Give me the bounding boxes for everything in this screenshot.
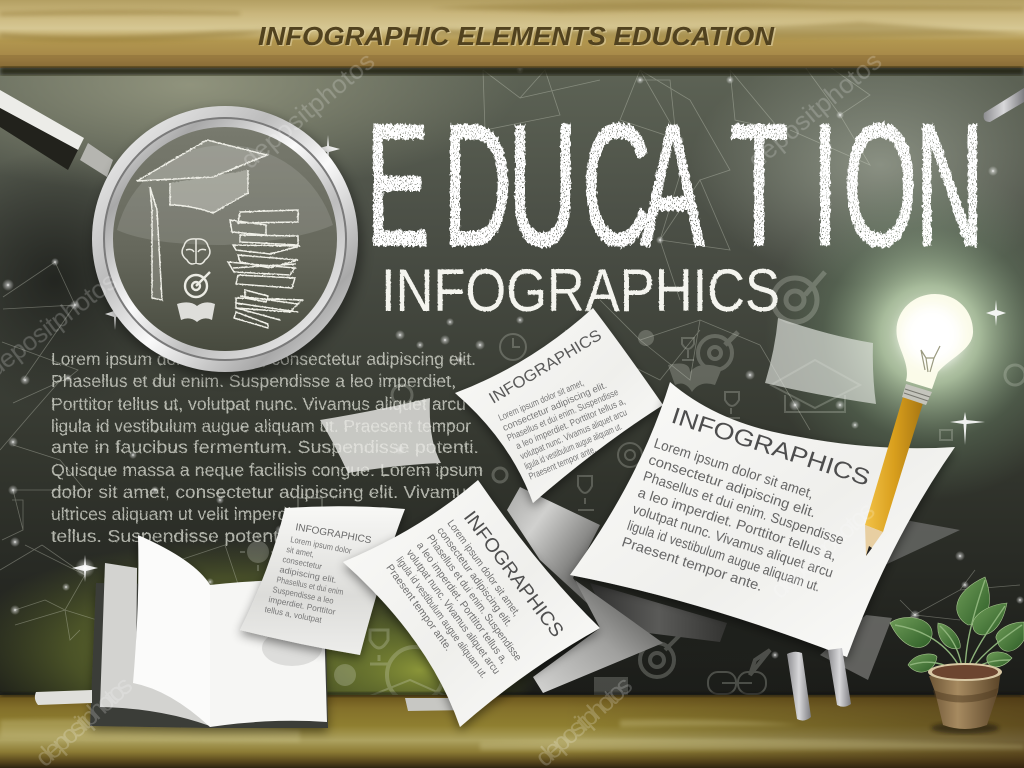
large paper <box>570 382 955 657</box>
book cover <box>90 583 328 728</box>
frame shadow on board <box>0 67 1024 75</box>
chalk text paragraph: Quisque massa a neque facilisis congue. Lorem ipsum <box>51 460 483 480</box>
chalk piece: left <box>35 690 92 705</box>
small paper: adipiscing elit. <box>279 564 338 585</box>
small paper: consectetur <box>282 554 323 571</box>
small paper: imperdiet. Porttitor <box>268 594 337 617</box>
book right page <box>210 581 327 727</box>
flower pot <box>929 670 1001 729</box>
top paper: Praesent tempor ante. <box>527 444 598 483</box>
center paper: consectetur adipiscing elit. <box>434 525 515 629</box>
main title: education: EDUCATION <box>366 88 984 282</box>
chalk text paragraph: Phasellus et dui enim. Suspendisse a leo imperdiet, <box>51 371 456 391</box>
chalk text paragraph <box>51 349 483 546</box>
top paper: consectetur adipiscing elit. <box>501 380 609 434</box>
top wood frame <box>0 0 1024 68</box>
bottom wood ledge <box>0 692 1024 768</box>
large paper: a leo imperdiet. Porttitor tellus a, <box>636 484 839 563</box>
large paper: consectetur adipiscing elit. <box>647 451 818 520</box>
chalk piece: top right <box>984 88 1024 122</box>
chalk text paragraph: Lorem ipsum dolor sit amet, consectetur adipiscing elit. <box>51 349 476 369</box>
center paper: volutpat nunc. Vivamus aliquet arcu <box>404 547 502 677</box>
faint chalk icons on the board <box>240 272 1024 720</box>
center paper: INFOGRAPHICS <box>459 507 567 641</box>
chalk text paragraph: ultrices aliquam ut velit imperdiet <box>51 504 306 524</box>
chalk text paragraph: tellus. Suspendisse potenti <box>51 526 283 546</box>
standing chalk pieces <box>787 648 851 721</box>
lens icon: brain <box>182 239 210 264</box>
bulb base <box>902 384 932 405</box>
large paper: ligula id vestibulum augue aliquam ut. <box>625 517 822 595</box>
watermarks: depositphotos <box>235 46 380 175</box>
lens icon: graduation cap <box>137 140 267 300</box>
center paper: Lorem ipsum dolor sit amet, <box>445 518 522 619</box>
grey paper shapes behind <box>507 487 960 693</box>
small paper <box>240 506 405 655</box>
small paper: Phasellus et dui enim <box>276 574 344 597</box>
light bulb pencil <box>865 294 973 556</box>
center paper: a leo imperdiet. Porttitor tellus a, <box>414 540 510 666</box>
small paper: sit amet, <box>286 544 315 559</box>
book back page <box>100 563 210 726</box>
sparkle: four-point stars <box>72 135 1006 582</box>
top paper: INFOGRAPHICS <box>486 327 605 407</box>
top paper: ligula id vestibulum augue aliquam ut. <box>523 421 624 472</box>
center paper: ligula id vestibulum augue aliquam ut. <box>394 555 490 681</box>
watermarks: depositphotos <box>764 495 881 604</box>
small paper: tellus a, volutpat <box>264 604 323 625</box>
translucent torn paper: left <box>320 398 441 473</box>
large paper: Lorem ipsum dolor sit amet, <box>652 435 816 501</box>
top paper <box>455 308 663 503</box>
center paper <box>343 480 600 727</box>
plant in pot <box>890 577 1024 734</box>
magnifying glass <box>0 90 362 379</box>
chalk text paragraph: ligula id vestibulum augue aliquam ut. Praesent tempor <box>51 416 471 436</box>
chalk text paragraph: dolor sit amet, consectetur adipiscing elit. Vivamus <box>51 482 476 502</box>
subtitle: infographics: INFOGRAPHICS <box>381 257 780 324</box>
center paper: Phasellus et dui enim. Suspendisse <box>424 533 524 663</box>
top paper: a leo imperdiet. Porttitor tellus a, <box>514 396 627 452</box>
plant leaves <box>890 577 1024 672</box>
bulb glass <box>896 294 973 389</box>
small paper: INFOGRAPHICS <box>294 522 373 546</box>
chalk text paragraph: Porttitor tellus ut, volutpat nunc. Vivamus aliquet arcu <box>51 394 466 414</box>
lens icon: target <box>185 272 210 297</box>
lens icon: stack of books <box>228 210 302 328</box>
top paper: Phasellus et dui enim. Suspendisse <box>505 387 620 444</box>
center paper: Praesent tempor ante. <box>383 562 454 653</box>
small paper: Lorem ipsum dolor <box>290 534 353 556</box>
large paper: Phasellus et dui enim. Suspendisse <box>641 468 846 548</box>
magnifier ring <box>92 106 358 372</box>
chalk text paragraph: ante in faucibus fermentum. Suspendisse potenti. <box>51 437 479 457</box>
chalk piece: under paper <box>405 698 470 711</box>
small paper: Suspendisse a leo <box>272 584 335 606</box>
magnifier handle <box>0 90 113 177</box>
header: infographic elements education: INFOGRAPHIC ELEMENTS EDUCATION <box>260 22 777 52</box>
top paper: volutpat nunc. Vivamus aliquet arcu <box>519 407 629 462</box>
open book <box>90 535 328 728</box>
translucent torn paper: mortarboard <box>765 318 876 404</box>
large paper: INFOGRAPHICS <box>668 402 873 491</box>
book raised page <box>133 535 210 727</box>
large paper: volutpat nunc. Vivamus aliquet arcu <box>631 500 835 581</box>
watermarks: depositphotos <box>742 46 887 175</box>
top paper: Lorem ipsum dolor sit amet, <box>497 378 586 424</box>
lens icon: open book <box>177 302 215 322</box>
large paper: Praesent tempor ante. <box>620 533 765 594</box>
header: infographic elements education: INFOGRAPHIC ELEMENTS EDUCATION <box>258 21 775 51</box>
pencil <box>865 397 923 556</box>
magnifier lens <box>113 127 337 351</box>
